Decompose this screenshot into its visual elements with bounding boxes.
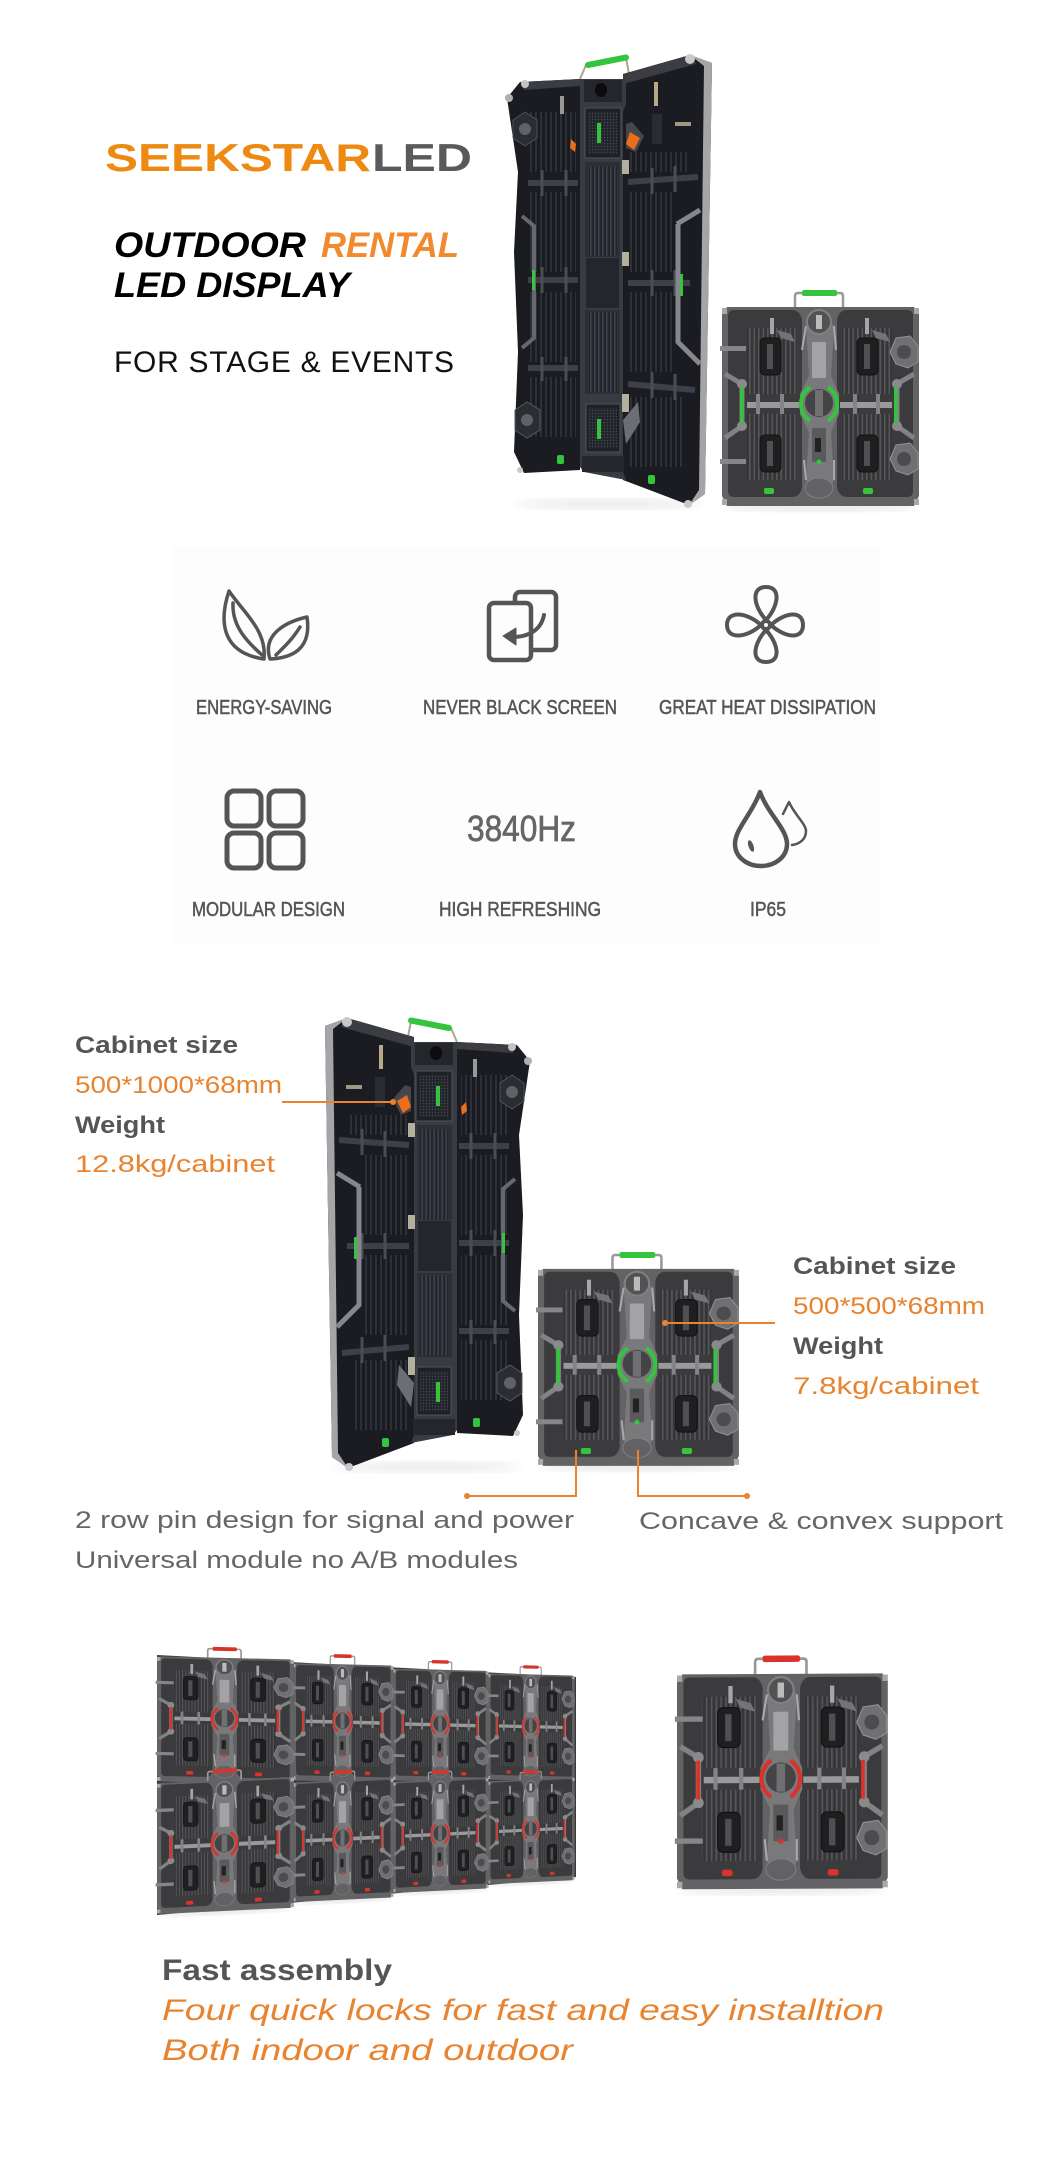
text: quick locks description: Four quick locks for fast and easy installtion <box>162 1994 884 2027</box>
label: never black screen: NEVER BLACK SCREEN <box>423 697 617 719</box>
product photo: square cabinet small <box>536 1252 739 1470</box>
text: pin design notes: Universal module no A/B modules <box>75 1547 518 1574</box>
text: pin design notes: 2 row pin design for signal and power <box>75 1507 574 1534</box>
icon: four modules <box>227 791 303 868</box>
callout: tall cabinet specs: 12.8kg/cabinet <box>75 1151 275 1178</box>
icon: water drops <box>735 792 806 866</box>
arrow: square cabinet pointer <box>662 1320 775 1326</box>
callout: square cabinet specs <box>793 1253 985 1400</box>
callout: tall cabinet specs: Weight <box>75 1112 165 1139</box>
label: high refreshing: HIGH REFRESHING <box>439 899 601 921</box>
label: modular design: MODULAR DESIGN <box>192 899 345 921</box>
title: outdoor rental LED display: OUTDOOR <box>114 226 307 265</box>
product photo: tall cabinet <box>505 54 712 508</box>
icon: fan <box>727 587 803 662</box>
label: great heat dissipation: GREAT HEAT DISSIPATION <box>659 697 876 719</box>
logo: SeekStar LED: SEEKSTAR <box>105 137 371 180</box>
arrow: pin design connector <box>464 1450 576 1499</box>
icon: leaves <box>224 591 308 659</box>
text: concave and convex support: Concave & convex support <box>639 1508 1003 1535</box>
logo: SeekStar LED: LED <box>372 137 472 180</box>
text: pin design notes <box>75 1507 574 1574</box>
title: outdoor rental LED display <box>114 226 459 305</box>
callout: tall cabinet specs <box>75 1032 282 1178</box>
title: outdoor rental LED display: LED DISPLAY <box>114 266 353 305</box>
product photo: square cabinet <box>720 290 919 510</box>
callout: tall cabinet specs: Cabinet size <box>75 1032 238 1059</box>
product photo: assembled wall of cabinets <box>156 1646 576 1917</box>
panel: feature icons <box>172 546 880 944</box>
subtitle: for stage and events: FOR STAGE & EVENTS <box>114 346 454 379</box>
callout: square cabinet specs: Cabinet size <box>793 1253 956 1280</box>
text: quick locks description <box>162 1994 884 2067</box>
text: quick locks description: Both indoor and outdoor <box>162 2034 574 2067</box>
product photo: single assembled cabinet <box>675 1655 888 1894</box>
heading: fast assembly: Fast assembly <box>162 1954 392 1987</box>
title: outdoor rental LED display: RENTAL <box>321 226 459 265</box>
callout: tall cabinet specs: 500*1000*68mm <box>75 1072 282 1099</box>
callout: square cabinet specs: 7.8kg/cabinet <box>793 1373 979 1400</box>
logo: SeekStar LED <box>105 137 472 180</box>
arrow: concave support connector <box>638 1450 750 1499</box>
arrow: tall cabinet pointer <box>282 1099 396 1105</box>
callout: square cabinet specs: 500*500*68mm <box>793 1293 985 1320</box>
callout: square cabinet specs: Weight <box>793 1333 883 1360</box>
icon: swap screens <box>489 592 556 660</box>
label: IP65: IP65 <box>750 899 786 921</box>
product photo: tall cabinet mirrored <box>325 1017 532 1471</box>
figure: 3840Hz: 3840Hz <box>467 808 576 849</box>
label: energy-saving: ENERGY-SAVING <box>196 697 332 719</box>
